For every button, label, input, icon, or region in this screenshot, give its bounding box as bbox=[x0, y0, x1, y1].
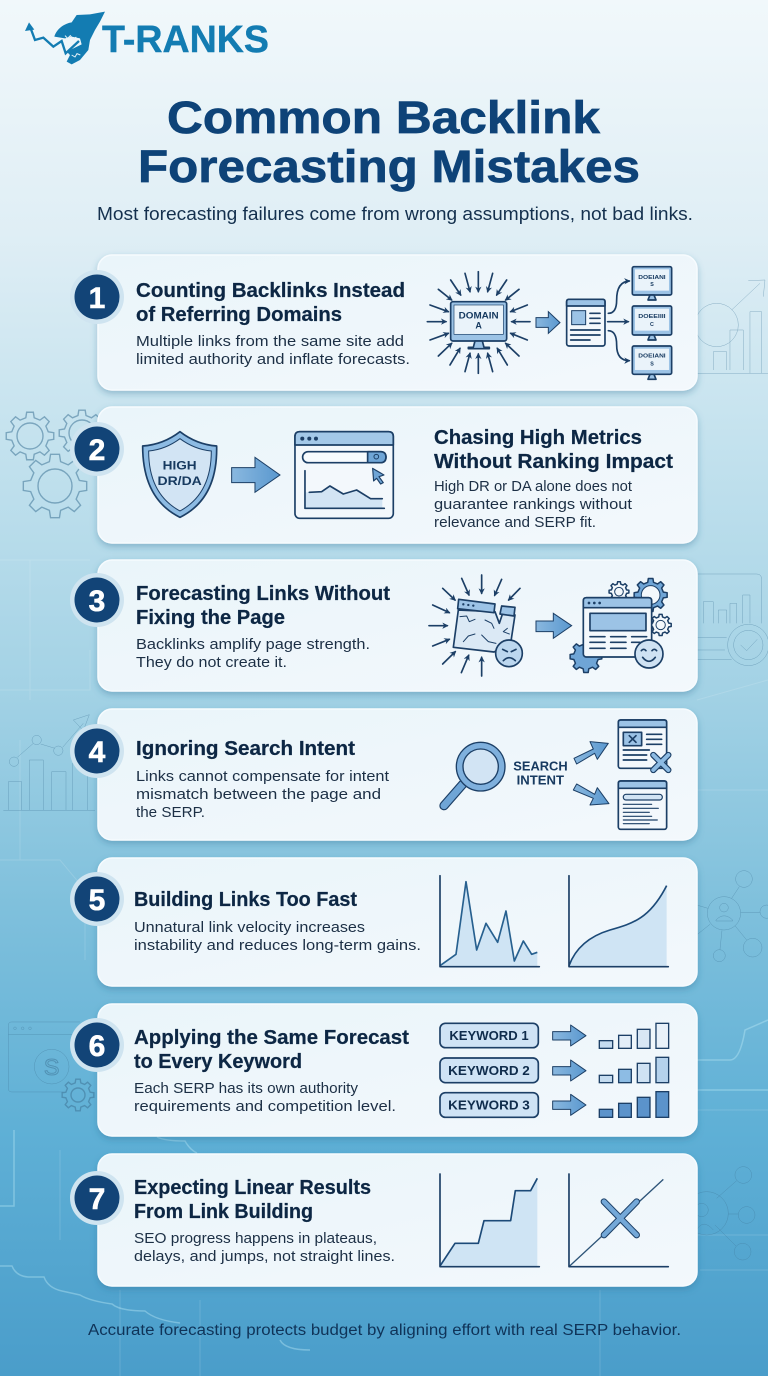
panel: mistake 3 bbox=[70, 560, 697, 691]
logo wordmark: T-RANKS bbox=[102, 19, 269, 61]
panel: mistake 7 bbox=[70, 1154, 697, 1286]
keyword 1 row bbox=[440, 1023, 669, 1048]
background icon: small gear bbox=[62, 1079, 94, 1111]
number badge 1: 1 bbox=[89, 282, 105, 315]
number badge 6: 6 bbox=[89, 1030, 105, 1063]
heading 1: Counting Backlinks Instead bbox=[136, 279, 405, 302]
heading 1 bbox=[136, 279, 405, 326]
number badge 3 bbox=[70, 573, 124, 627]
heading 3 bbox=[136, 582, 390, 629]
heading 1: of Referring Domains bbox=[136, 303, 342, 326]
panel: mistake 1 bbox=[70, 255, 697, 390]
heading 2: Without Ranking Impact bbox=[434, 450, 673, 473]
background icon: dashboard with check bbox=[697, 574, 768, 666]
description 4: the SERP. bbox=[136, 805, 205, 821]
icon: links converging on one domain, then spreading to other domains: DOEIANI bbox=[638, 354, 666, 360]
icon: search intent magnifier with two result pages bbox=[444, 720, 668, 829]
icon: links converging on one domain, then spreading to other domains: DOMAIN bbox=[459, 310, 499, 320]
description 7 bbox=[134, 1231, 395, 1265]
heading 6: to Every Keyword bbox=[134, 1050, 302, 1073]
logo: T-RANKS bbox=[25, 12, 269, 64]
icon: dinosaur with rising arrow bbox=[25, 12, 105, 64]
description 3 bbox=[136, 637, 370, 671]
heading 6 bbox=[134, 1026, 409, 1073]
background icon: rising chart with magnifier bbox=[695, 280, 768, 373]
description 6 bbox=[134, 1081, 396, 1115]
chart: stepped SEO progress bbox=[440, 1174, 539, 1267]
number badge 6 bbox=[70, 1018, 124, 1072]
icon: links converging on one domain, then spreading to other domains: S bbox=[650, 361, 654, 367]
panel: mistake 2 bbox=[70, 407, 697, 543]
description 4: mismatch between the page and bbox=[136, 787, 381, 803]
heading 6: Applying the Same Forecast bbox=[134, 1026, 409, 1049]
keyword 3 row: KEYWORD 3 bbox=[448, 1099, 530, 1113]
title: Common Backlink bbox=[167, 92, 601, 143]
heading 5: Building Links Too Fast bbox=[134, 888, 357, 911]
number badge 3: 3 bbox=[89, 585, 105, 618]
heading 4: Ignoring Search Intent bbox=[136, 737, 355, 760]
description 5 bbox=[134, 920, 421, 954]
panel: mistake 4 bbox=[70, 709, 697, 840]
icon: high DR/DA shield leads to a search results page: DR/DA bbox=[157, 474, 202, 488]
icon: links converging on one domain, then spreading to other domains: DOEIANI bbox=[638, 275, 666, 281]
title bbox=[138, 92, 640, 192]
description 7: delays, and jumps, not straight lines. bbox=[134, 1249, 395, 1265]
heading 2 bbox=[434, 426, 673, 473]
keyword rows with arrows and bars bbox=[440, 1023, 669, 1117]
chart: straight line crossed out bbox=[569, 1174, 668, 1267]
description 1: Multiple links from the same site add bbox=[136, 334, 404, 350]
background icon: gears bbox=[6, 410, 105, 518]
background icon: browser with coin and gear: S bbox=[44, 1054, 59, 1080]
number badge 5 bbox=[70, 872, 124, 926]
icon: high DR/DA shield leads to a search results page: HIGH bbox=[163, 458, 197, 472]
description 2 bbox=[434, 479, 632, 531]
number badge 2: 2 bbox=[89, 434, 105, 467]
heading 2: Chasing High Metrics bbox=[434, 426, 642, 449]
chart: spiky link velocity bbox=[440, 876, 539, 967]
title: Forecasting Mistakes bbox=[138, 141, 640, 192]
background icon: people network bbox=[697, 871, 768, 962]
description 4 bbox=[136, 769, 389, 821]
background icon: network bbox=[685, 1167, 755, 1260]
keyword 3 row bbox=[440, 1092, 669, 1117]
number badge 4 bbox=[70, 724, 124, 778]
description 3: Backlinks amplify page strength. bbox=[136, 637, 370, 653]
number badge 1 bbox=[70, 270, 124, 324]
description 1 bbox=[136, 334, 410, 368]
description 7: SEO progress happens in plateaus, bbox=[134, 1231, 377, 1247]
icon: links converging on one domain, then spreading to other domains: A bbox=[475, 321, 482, 331]
icon: links converging on one domain, then spreading to other domains: S bbox=[650, 282, 654, 288]
number badge 2 bbox=[70, 422, 124, 476]
description 1: limited authority and inflate forecasts. bbox=[136, 352, 410, 368]
description 2: guarantee rankings without bbox=[434, 497, 632, 513]
keyword 2 row bbox=[440, 1057, 669, 1083]
panel: mistake 6 bbox=[70, 1004, 697, 1136]
background icon: browser with coin and gear bbox=[8, 1022, 80, 1092]
description 4: Links cannot compensate for intent bbox=[136, 769, 389, 785]
icon: search intent magnifier with two result pages: INTENT bbox=[517, 773, 564, 787]
background icon: bar and line chart bbox=[3, 715, 95, 811]
description 2: relevance and SERP fit. bbox=[434, 515, 596, 531]
subtitle: Most forecasting failures come from wrong assumptions, not bad links. bbox=[97, 204, 693, 224]
description 5: Unnatural link velocity increases bbox=[134, 920, 365, 936]
panel: mistake 5 bbox=[70, 858, 697, 986]
description 5: instability and reduces long-term gains. bbox=[134, 938, 421, 954]
chart: smooth growth curve bbox=[569, 876, 668, 967]
number badge 5: 5 bbox=[89, 884, 105, 917]
number badge 7 bbox=[70, 1171, 124, 1225]
icon: links converging on one domain, then spreading to other domains: DOEEIIII bbox=[638, 314, 666, 320]
description 6: requirements and competition level. bbox=[134, 1099, 396, 1115]
heading 3: Forecasting Links Without bbox=[136, 582, 390, 605]
footer note: Accurate forecasting protects budget by aligning effort with real SERP behavior. bbox=[88, 1322, 681, 1339]
description 3: They do not create it. bbox=[136, 655, 287, 671]
description 2: High DR or DA alone does not bbox=[434, 479, 632, 495]
heading 7 bbox=[134, 1176, 371, 1223]
heading 7: From Link Building bbox=[134, 1200, 313, 1223]
icon: high DR/DA shield leads to a search results page bbox=[143, 432, 393, 518]
number badge 7: 7 bbox=[89, 1183, 105, 1216]
icon: links converging on one domain, then spreading to other domains: C bbox=[650, 322, 654, 328]
icon: links converging on one domain, then spreading to other domains bbox=[427, 267, 672, 379]
description 6: Each SERP has its own authority bbox=[134, 1081, 359, 1097]
number badge 4: 4 bbox=[89, 736, 106, 769]
heading 7: Expecting Linear Results bbox=[134, 1176, 371, 1199]
icon: broken page becomes a fixed page bbox=[429, 575, 671, 676]
keyword 1 row: KEYWORD 1 bbox=[449, 1029, 529, 1043]
keyword 2 row: KEYWORD 2 bbox=[448, 1064, 530, 1078]
icon: search intent magnifier with two result pages: SEARCH bbox=[513, 760, 568, 774]
heading 3: Fixing the Page bbox=[136, 606, 285, 629]
